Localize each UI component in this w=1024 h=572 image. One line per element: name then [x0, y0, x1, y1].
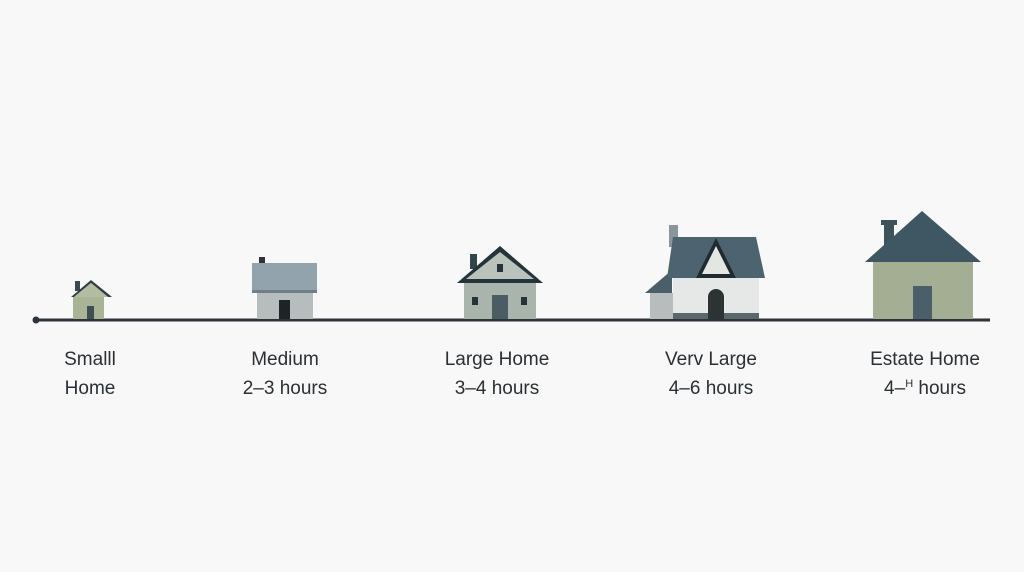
- icon: medium home: [252, 257, 317, 319]
- label: very large: 4–6 hours: [669, 378, 753, 399]
- label: estate home: Estate Home: [870, 349, 980, 370]
- label: medium: [243, 349, 327, 399]
- icon: estate home: [865, 211, 981, 319]
- icon: large home: [457, 246, 543, 319]
- label: large home: 3–4 hours: [455, 378, 539, 399]
- label: medium: Medium: [251, 349, 319, 370]
- label: large home: [445, 349, 549, 399]
- label: small home: Home: [65, 378, 115, 399]
- label: medium: 2–3 hours: [243, 378, 327, 399]
- timeline axis: [32, 316, 990, 324]
- icon: small home: [71, 280, 112, 319]
- label: estate home: 4–H hours: [884, 378, 966, 399]
- label: small home: [64, 349, 116, 399]
- label: very large: Verv Large: [665, 349, 757, 370]
- label: very large: [665, 349, 757, 399]
- label: small home: Smalll: [64, 349, 116, 370]
- icon: very large home: [645, 225, 765, 319]
- label: large home: Large Home: [445, 349, 549, 370]
- label: estate home: [870, 349, 980, 399]
